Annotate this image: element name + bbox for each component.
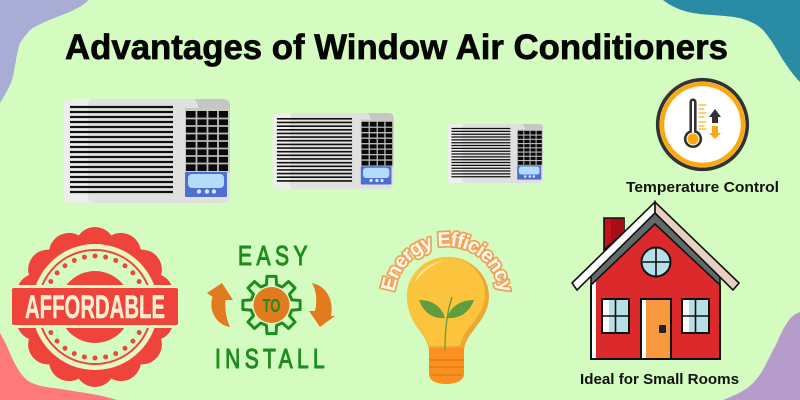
- icon: gear with TO: TO: [262, 296, 280, 316]
- icon: house: [572, 202, 739, 359]
- text: install: INSTALL: [215, 344, 329, 375]
- air conditioner: small: [448, 124, 543, 183]
- arrow: up: [207, 283, 233, 327]
- text: energy efficiency: Energy Efficiency: [379, 230, 512, 292]
- title: Advantages of Window Air Conditioners: [65, 28, 728, 67]
- corner blob: bottom right: [723, 312, 800, 400]
- icon: temperature control: [658, 80, 747, 169]
- icon: gear with TO: [243, 276, 300, 334]
- air conditioner: large: [64, 99, 230, 203]
- corner blob: top left: [0, 0, 89, 103]
- label: temperature control: Temperature Control: [626, 179, 779, 196]
- text: easy: EASY: [238, 241, 312, 272]
- badge: affordable: AFFORDABLE: [25, 289, 165, 325]
- icon: light bulb with sprout: [407, 257, 489, 384]
- air conditioner: medium: [272, 113, 394, 189]
- label: ideal for small rooms: Ideal for Small Rooms: [580, 371, 739, 388]
- badge: affordable: [9, 226, 181, 388]
- corner blob: bottom left: [0, 333, 117, 400]
- corner blob: top right: [663, 0, 800, 82]
- arrow: down: [309, 283, 335, 327]
